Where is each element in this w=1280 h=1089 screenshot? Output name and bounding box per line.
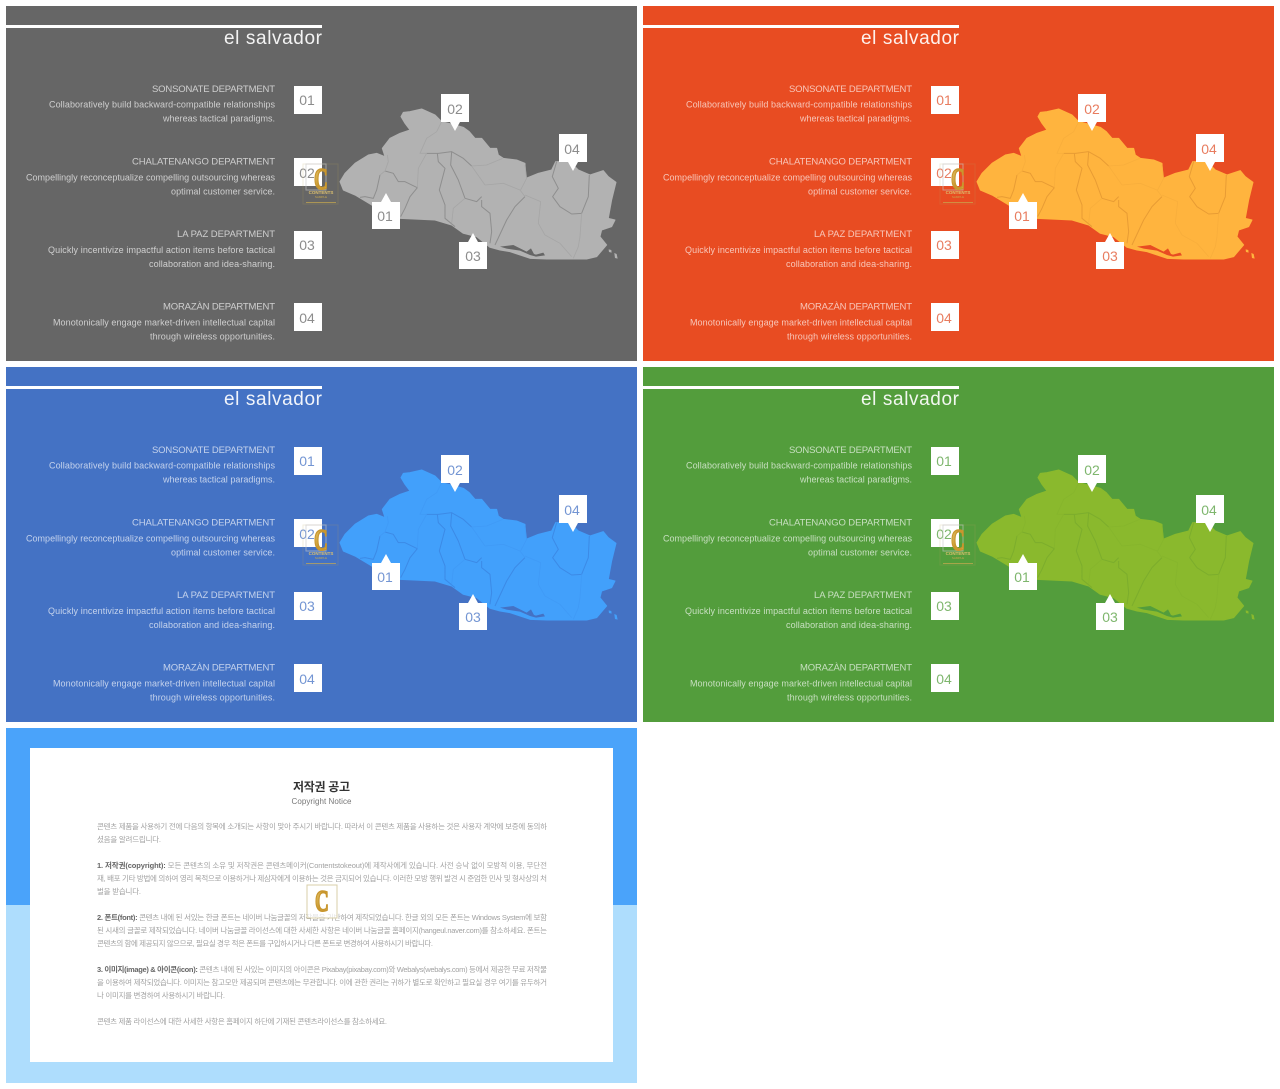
text block: Sonsonate — [49, 445, 276, 484]
text block: Sonsonate: whereas tactical paradigms. — [799, 474, 912, 484]
number boxes: 03 — [936, 598, 952, 614]
text block: Morazan — [53, 662, 275, 702]
text block: Sonsonate: whereas tactical paradigms. — [162, 474, 275, 484]
text block: Morazan: MORAZÀN DEPARTMENT — [163, 662, 275, 674]
number boxes: 01 — [299, 453, 315, 469]
text block: La Paz: LA PAZ DEPARTMENT — [814, 229, 912, 240]
callouts — [1009, 455, 1224, 630]
number boxes: 01 — [936, 92, 952, 108]
watermark: C — [315, 883, 329, 918]
text block: Sonsonate: Collaboratively build backward-compatible relationships — [686, 100, 912, 110]
text block: Sonsonate: SONSONATE DEPARTMENT — [152, 84, 275, 95]
text block: La Paz: LA PAZ DEPARTMENT — [814, 590, 912, 601]
callouts: 02 — [447, 462, 463, 478]
text block: Chalatenango: CHALATENANGO DEPARTMENT — [132, 518, 275, 528]
text block: Morazan: Monotonically engage market-driven intellectual capital — [690, 318, 912, 328]
heading: 저작권 공고 — [293, 779, 350, 794]
text block: Chalatenango: Compellingly reconceptualize compelling outsourcing whereas — [663, 172, 912, 182]
callouts: 03 — [465, 609, 481, 625]
text block: Chalatenango: optimal customer service. — [808, 548, 912, 558]
watermark: C — [314, 161, 328, 196]
text block: font: 2. 폰트(font): 콘텐츠 내에 된 서있는 한글 폰트는 네이버 나눔글꼴의 저작물을 기반하여 제작되었습니다. 한글 외의 모든 폰트는 Windows System에 보함 — [97, 912, 547, 922]
callouts: 04 — [1201, 141, 1217, 157]
watermark: SAMPLE — [952, 556, 964, 560]
text block: Chalatenango — [663, 156, 912, 196]
text block: copyright: 1. 저작권(copyright): 모든 콘텐츠의 소유 및 저작권은 콘텐츠메이커(Contentstokeout)에 제작사에게 있습니다. 사전 승낙 없이 모방적 이용, 무단전 — [97, 860, 547, 870]
text block: Morazan: through wireless opportunities. — [150, 332, 275, 342]
number boxes: 03 — [299, 237, 315, 253]
text block: Sonsonate: SONSONATE DEPARTMENT — [152, 445, 275, 456]
text block: Chalatenango: CHALATENANGO DEPARTMENT — [769, 156, 912, 168]
text block: La Paz: LA PAZ DEPARTMENT — [177, 590, 275, 601]
title: el salvador — [224, 28, 323, 49]
text block: font: 콘텐츠의 함에 제공되지 않으므로, 필요실 경우 적은 폰트를 구입하시거나 다른 폰트로 변경하여 사용하시기 바랍니다. — [97, 938, 433, 948]
panel: blue — [6, 367, 637, 722]
callouts — [372, 94, 587, 269]
callouts: 01 — [1014, 208, 1030, 224]
text block: La Paz: Quickly incentivize impactful action items before tactical — [48, 606, 275, 616]
text block: La Paz: collaboration and idea-sharing. — [786, 620, 912, 630]
text block: Sonsonate: SONSONATE DEPARTMENT — [789, 84, 912, 95]
watermark: C — [951, 161, 965, 196]
watermark: CONTENTS — [946, 551, 970, 556]
callouts — [372, 455, 587, 630]
text block: Sonsonate: whereas tactical paradigms. — [799, 114, 912, 124]
text block: intro: 셨음을 알려드립니다. — [97, 834, 161, 844]
text block: copyright: 재, 배포 기타 방법에 의하여 영리 목적으로 이용하거나 제삼자에게 이용하는 것은 금지되어 있습니다. 이러한 모방 행위 발견 시 준엄한 민사 및 형사상의 처 — [97, 873, 547, 883]
text block: Chalatenango — [663, 518, 912, 558]
text block: Morazan — [53, 302, 275, 342]
text block: La Paz — [48, 590, 275, 630]
text block: image and icon: 3. 이미지(image) & 아이콘(icon): 콘텐츠 내에 된 사있는 이미지의 아이콘은 Pixabay(pixabay.com)와 Webalys(webalys.com) 등에서 제공한 무료 저작물 — [97, 964, 547, 974]
number boxes: 04 — [299, 671, 315, 687]
watermark: CONTENTS — [309, 551, 333, 556]
watermark: SAMPLE — [315, 195, 327, 199]
watermark: SAMPLE — [315, 556, 327, 560]
number boxes: 02 — [299, 165, 315, 181]
watermark: CONTENTS — [309, 190, 333, 195]
text block: intro: 콘텐츠 제품을 사용하기 전에 다음의 항목에 소개되는 사항이 맞아 주시기 바랍니다. 따라서 이 콘텐츠 제품을 사용하는 것은 사용자 계약에 보증에 동의하 — [97, 821, 547, 831]
text block: Chalatenango: optimal customer service. — [171, 186, 275, 196]
text block: Morazan: through wireless opportunities. — [787, 692, 912, 702]
number boxes — [931, 447, 959, 692]
number boxes: 04 — [936, 310, 952, 326]
text block: La Paz — [685, 229, 912, 269]
text block: closing: 콘텐츠 제품 라이선스에 대한 사세한 사항은 홈페이지 하단에 기재된 콘텐츠라이선스를 참소하세요. — [97, 1016, 387, 1026]
callouts: 01 — [1014, 569, 1030, 585]
callouts: 01 — [377, 208, 393, 224]
text block: La Paz: collaboration and idea-sharing. — [149, 620, 275, 630]
text block: La Paz — [685, 590, 912, 630]
number boxes: 02 — [299, 526, 315, 542]
map — [340, 109, 618, 259]
text block: Sonsonate — [686, 445, 912, 484]
text block: Morazan: through wireless opportunities. — [787, 332, 912, 342]
text block: La Paz: Quickly incentivize impactful action items before tactical — [685, 606, 912, 616]
panel: copyright notice — [6, 728, 637, 1083]
text block: Chalatenango: Compellingly reconceptualize compelling outsourcing whereas — [663, 534, 912, 544]
callouts — [1009, 94, 1224, 269]
panel: green — [643, 367, 1274, 722]
subheading: Copyright Notice — [292, 797, 352, 806]
title: el salvador — [224, 389, 323, 410]
text block: Chalatenango — [26, 156, 276, 196]
text block: Sonsonate: SONSONATE DEPARTMENT — [789, 445, 912, 456]
map — [977, 470, 1255, 620]
text block: Sonsonate: Collaboratively build backward-compatible relationships — [686, 460, 912, 470]
number boxes: 01 — [936, 453, 952, 469]
callouts: 01 — [377, 569, 393, 585]
callouts: 03 — [1102, 248, 1118, 264]
callouts: 04 — [564, 141, 580, 157]
text block: Morazan: MORAZÀN DEPARTMENT — [800, 662, 912, 674]
panel: orange — [643, 6, 1274, 361]
text block: Chalatenango: CHALATENANGO DEPARTMENT — [132, 156, 275, 168]
panel: grey — [6, 6, 637, 361]
callouts: 03 — [1102, 609, 1118, 625]
callouts: 03 — [465, 248, 481, 264]
map — [340, 470, 618, 620]
text block: Morazan: through wireless opportunities. — [150, 692, 275, 702]
text block: Morazan — [690, 662, 912, 702]
text block: La Paz: Quickly incentivize impactful action items before tactical — [685, 245, 912, 255]
text block: Morazan: Monotonically engage market-driven intellectual capital — [690, 678, 912, 688]
callouts: 02 — [1084, 101, 1100, 117]
text block: Sonsonate: Collaboratively build backward-compatible relationships — [49, 100, 276, 110]
text block: La Paz: Quickly incentivize impactful action items before tactical — [48, 245, 275, 255]
text block: font: 된 시새의 글꼴로 제작되었습니다. 네이버 나눔글꼴 라이선스에 대한 사세한 사항은 네이버 나눔글꼴 홈페이지(hangeul.naver.com)를 참소하세요. 폰트는 — [97, 925, 547, 935]
text block: Chalatenango: CHALATENANGO DEPARTMENT — [769, 518, 912, 528]
text block: Chalatenango: optimal customer service. — [171, 548, 275, 558]
number boxes: 03 — [299, 598, 315, 614]
number boxes — [294, 447, 322, 692]
text block: Sonsonate: Collaboratively build backward-compatible relationships — [49, 460, 276, 470]
watermark — [303, 522, 338, 565]
text block: Morazan: Monotonically engage market-driven intellectual capital — [53, 318, 275, 328]
number boxes: 02 — [936, 526, 952, 542]
title: el salvador — [861, 389, 960, 410]
watermark — [307, 883, 337, 918]
watermark — [940, 522, 975, 565]
number boxes: 01 — [299, 92, 315, 108]
text block: intro — [97, 821, 547, 844]
number boxes — [294, 86, 322, 331]
number boxes — [931, 86, 959, 331]
text block: Morazan: MORAZÀN DEPARTMENT — [163, 302, 275, 312]
text block: Morazan — [690, 302, 912, 342]
text block: Sonsonate — [49, 84, 276, 124]
watermark — [940, 161, 975, 204]
watermark — [303, 161, 338, 204]
number boxes: 04 — [299, 310, 315, 326]
callouts: 04 — [564, 502, 580, 518]
watermark: C — [314, 522, 328, 557]
text block: image and icon — [97, 964, 547, 1000]
text block: copyright: 벌을 받습니다. — [97, 886, 141, 896]
text block: Chalatenango: Compellingly reconceptualize compelling outsourcing whereas — [26, 172, 276, 182]
watermark: SAMPLE — [952, 195, 964, 199]
text block: Chalatenango — [26, 518, 276, 558]
text block: La Paz: collaboration and idea-sharing. — [149, 259, 275, 269]
text block: Chalatenango: Compellingly reconceptualize compelling outsourcing whereas — [26, 534, 276, 544]
text block: Sonsonate — [686, 84, 912, 124]
text block: font — [97, 912, 547, 948]
map — [977, 109, 1255, 259]
callouts: 02 — [447, 101, 463, 117]
watermark: C — [951, 522, 965, 557]
number boxes: 03 — [936, 237, 952, 253]
text block: La Paz — [48, 229, 275, 269]
watermark: CONTENTS — [946, 190, 970, 195]
text block: Morazan: MORAZÀN DEPARTMENT — [800, 302, 912, 312]
text block: image and icon: 나 이미지를 변경하여 사용하시기 바랍니다. — [97, 990, 225, 1000]
callouts: 02 — [1084, 462, 1100, 478]
text block: Chalatenango: optimal customer service. — [808, 186, 912, 196]
text block: image and icon: 을 이용하여 제작되었습니다. 이미지는 참고모만 제공되며 콘텐츠에는 무관합니다. 이에 관한 권리는 귀하가 별도로 확인하고 필요실 경우 여기를 유두하거 — [97, 977, 547, 987]
number boxes: 02 — [936, 165, 952, 181]
text block: Sonsonate: whereas tactical paradigms. — [162, 114, 275, 124]
text block: La Paz: collaboration and idea-sharing. — [786, 259, 912, 269]
text block: La Paz: LA PAZ DEPARTMENT — [177, 229, 275, 240]
title: el salvador — [861, 28, 960, 49]
text block: Morazan: Monotonically engage market-driven intellectual capital — [53, 678, 275, 688]
callouts: 04 — [1201, 502, 1217, 518]
text block: copyright — [97, 860, 547, 896]
number boxes: 04 — [936, 671, 952, 687]
